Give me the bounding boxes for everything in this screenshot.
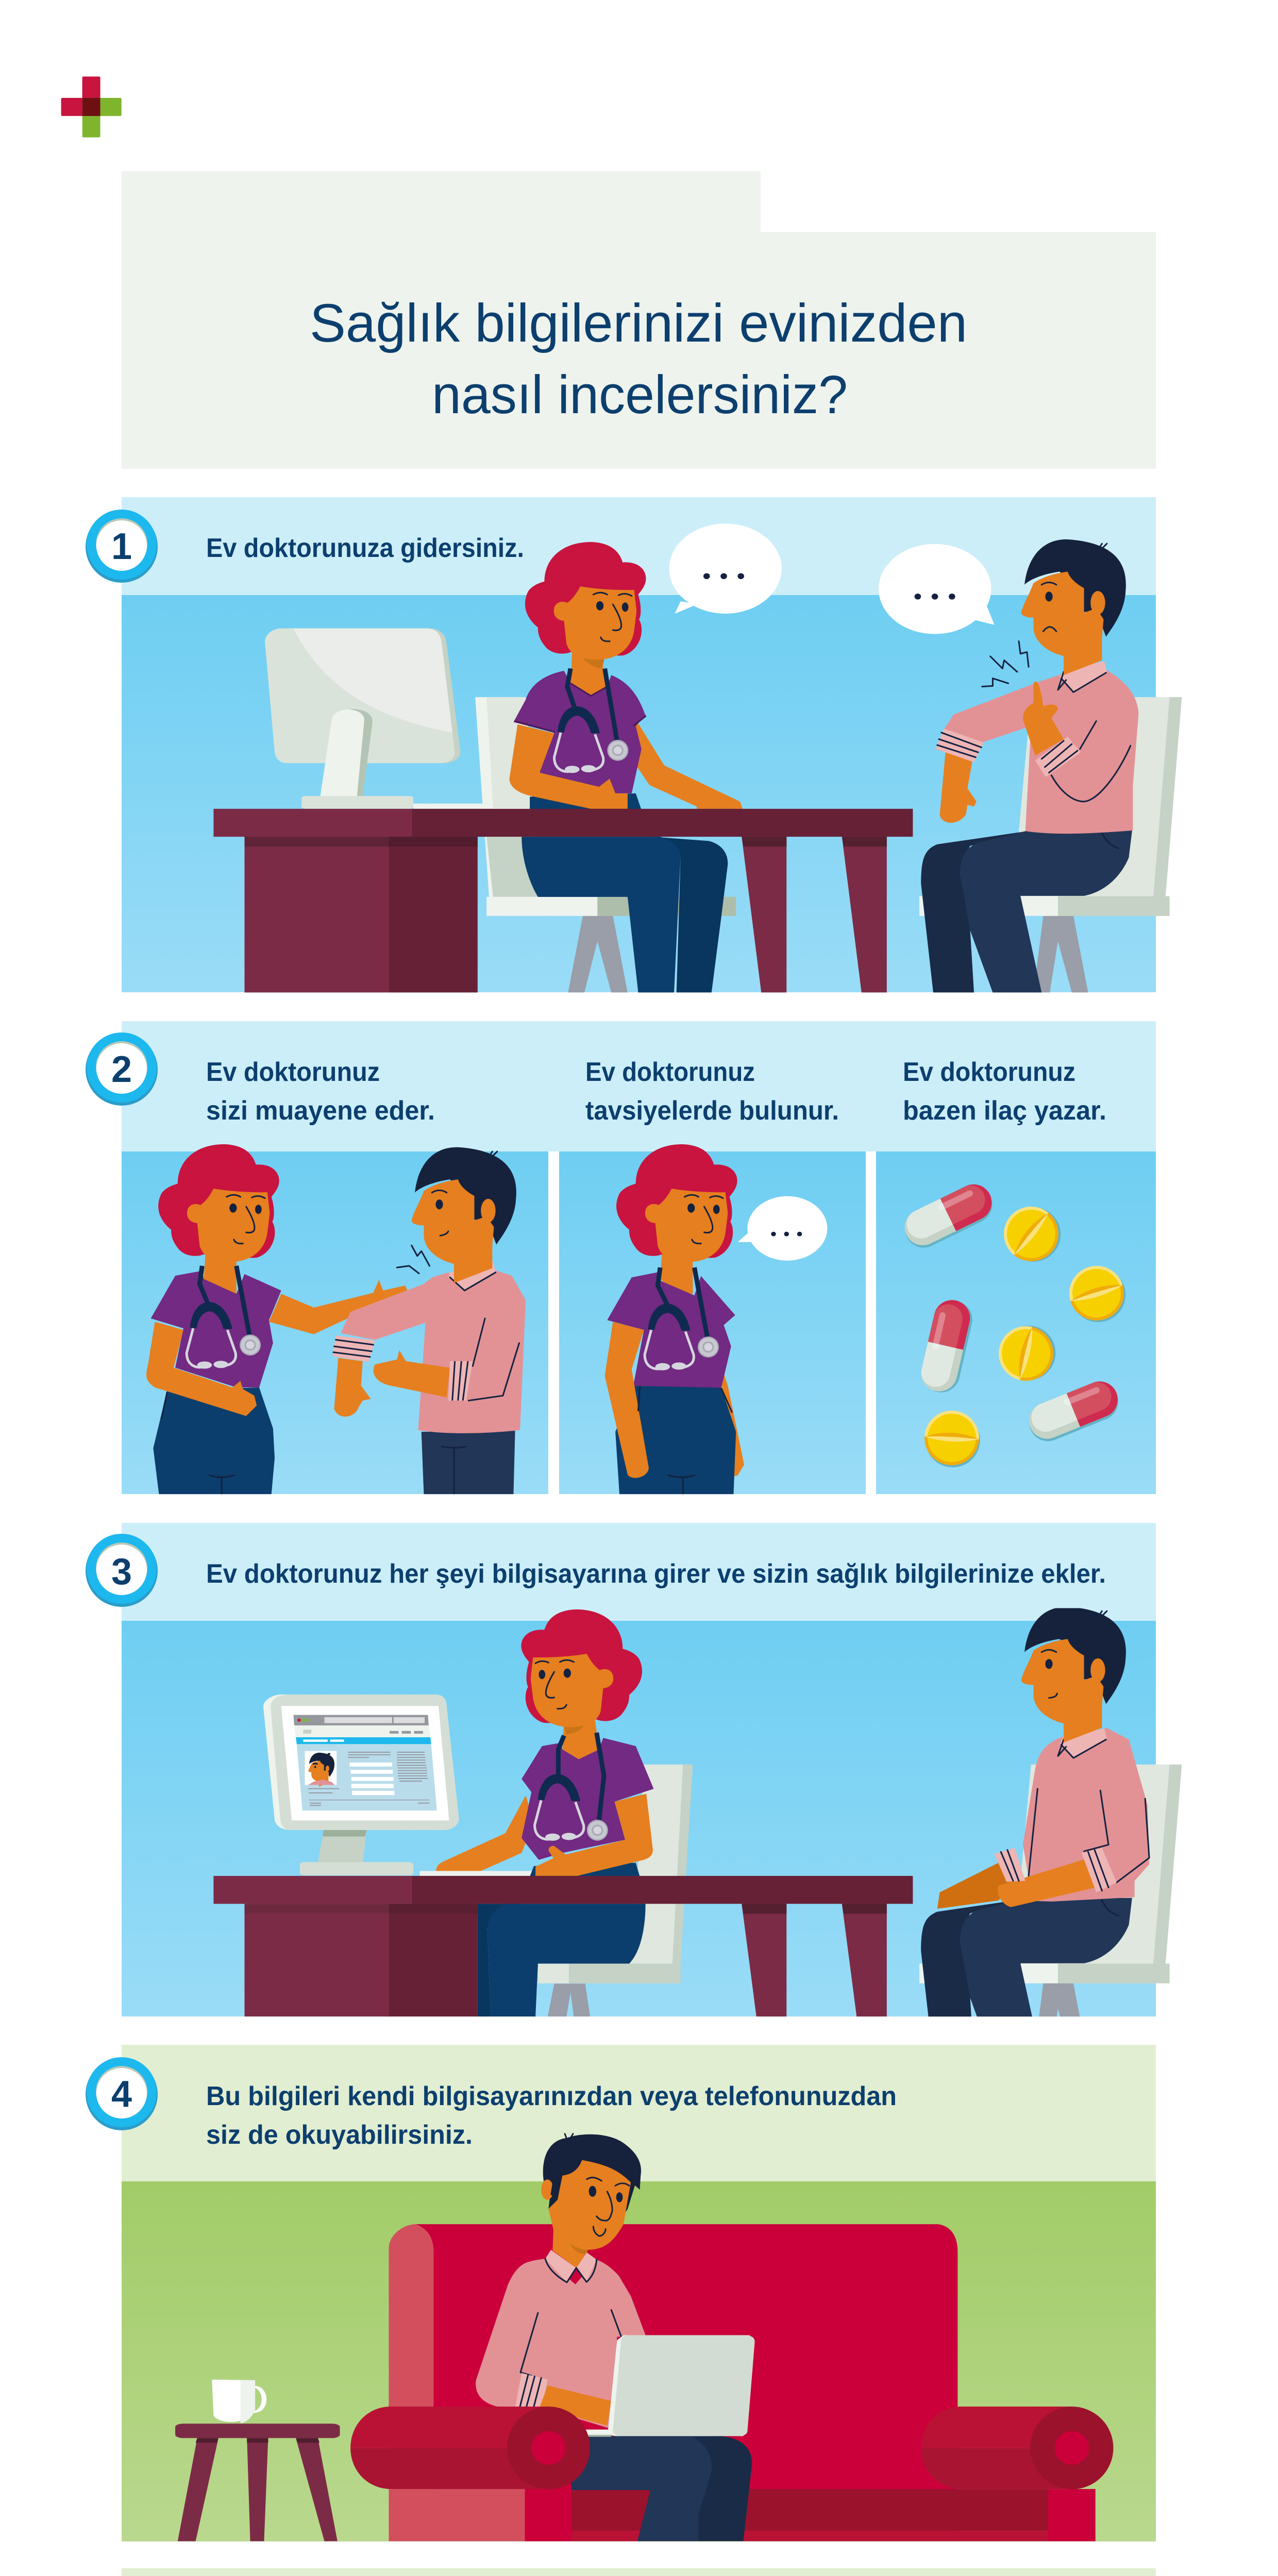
tablet 2 bbox=[1063, 1259, 1132, 1329]
chair: doctor bbox=[538, 1765, 693, 2016]
step 4 text bbox=[206, 2081, 897, 2150]
picture panels bbox=[122, 1151, 1156, 1494]
sofa armrest left bbox=[350, 2406, 590, 2489]
step 3 illustration bbox=[213, 1607, 1182, 2060]
step 4 text: siz de okuyabilirsiniz. bbox=[206, 2120, 473, 2150]
pills bbox=[898, 1178, 1132, 1469]
desk bbox=[213, 1876, 913, 2016]
patient being examined bbox=[332, 1147, 526, 1494]
panel: step 4 bbox=[122, 2045, 1156, 2541]
step 2 illustrations bbox=[146, 1144, 827, 1494]
patient listening bbox=[919, 1607, 1182, 2060]
doctor examining bbox=[146, 1144, 408, 1494]
panel: step 5 bbox=[122, 2568, 1156, 2576]
laptop back bbox=[585, 2335, 755, 2437]
chair: doctor bbox=[475, 697, 736, 992]
step badge 4 bbox=[86, 2057, 158, 2130]
capsule 1 bbox=[898, 1178, 999, 1254]
sofa armrest right bbox=[921, 2406, 1114, 2489]
step 2 text: prescription: bazen ilaç yazar. bbox=[903, 1096, 1106, 1126]
red sofa bbox=[389, 2224, 1096, 2541]
step 2 text: examination: sizi muayene eder. bbox=[206, 1096, 435, 1126]
man on sofa with laptop bbox=[476, 2134, 755, 2541]
step 2 text: advice bbox=[585, 1057, 839, 1126]
capsule 3 bbox=[1023, 1376, 1124, 1447]
step badge 4: 4 bbox=[111, 2074, 132, 2115]
step badge 1 bbox=[86, 510, 158, 583]
logo: medical cross bbox=[61, 77, 122, 138]
step 2 text: advice: Ev doktorunuz bbox=[585, 1057, 755, 1087]
step 2 text: advice: tavsiyelerde bulunur. bbox=[585, 1096, 839, 1126]
step badge 3: 3 bbox=[111, 1551, 132, 1592]
monitor with patient record bbox=[263, 1694, 532, 1876]
doctor advising bbox=[605, 1144, 744, 1494]
speech bubble small bbox=[737, 1196, 827, 1261]
title heading bbox=[310, 293, 967, 425]
step 2 text: examination bbox=[206, 1057, 435, 1126]
title heading: nasıl incelersiniz? bbox=[432, 365, 848, 425]
title panel bbox=[122, 171, 1156, 469]
tablet 3 bbox=[993, 1319, 1061, 1386]
step 3 text: Ev doktorunuz her şeyi bilgisayarına girer ve sizin sağlık bilgilerinize ekler. bbox=[206, 1559, 1106, 1589]
side table with mug bbox=[175, 2380, 340, 2541]
doctor typing bbox=[436, 1609, 653, 2016]
panel: step 3 bbox=[122, 1523, 1182, 2060]
title heading: Sağlık bilgilerinizi evinizden bbox=[310, 293, 967, 353]
doctor bbox=[510, 542, 743, 992]
step badge 3 bbox=[86, 1534, 158, 1607]
tablet 4 bbox=[923, 1409, 982, 1469]
step 4 illustration bbox=[175, 2134, 1114, 2541]
step 1 text: Ev doktorunuza gidersiniz. bbox=[206, 533, 524, 563]
step 4 text: Bu bilgileri kendi bilgisayarınızdan veya telefonunuzdan bbox=[206, 2081, 897, 2111]
panel: step 2 bbox=[122, 1021, 1156, 1494]
step badge 2 bbox=[86, 1032, 158, 1106]
step badge 1: 1 bbox=[111, 526, 132, 567]
speech bubble: patient bbox=[879, 544, 995, 634]
mug bbox=[212, 2380, 264, 2424]
step badge 2: 2 bbox=[111, 1049, 132, 1090]
capsule 2 bbox=[917, 1296, 976, 1396]
step 1 illustration bbox=[213, 523, 1182, 992]
computer monitor back bbox=[265, 629, 528, 809]
step 2 text: prescription bbox=[903, 1057, 1106, 1126]
step 2 text: examination: Ev doktorunuz bbox=[206, 1057, 380, 1087]
patient with chair bbox=[919, 539, 1182, 992]
step 2 text: prescription: Ev doktorunuz bbox=[903, 1057, 1075, 1087]
speech bubble: doctor bbox=[669, 523, 782, 614]
desk bbox=[213, 809, 913, 992]
panel: step 1 bbox=[122, 497, 1182, 992]
tablet 1 bbox=[993, 1195, 1072, 1274]
